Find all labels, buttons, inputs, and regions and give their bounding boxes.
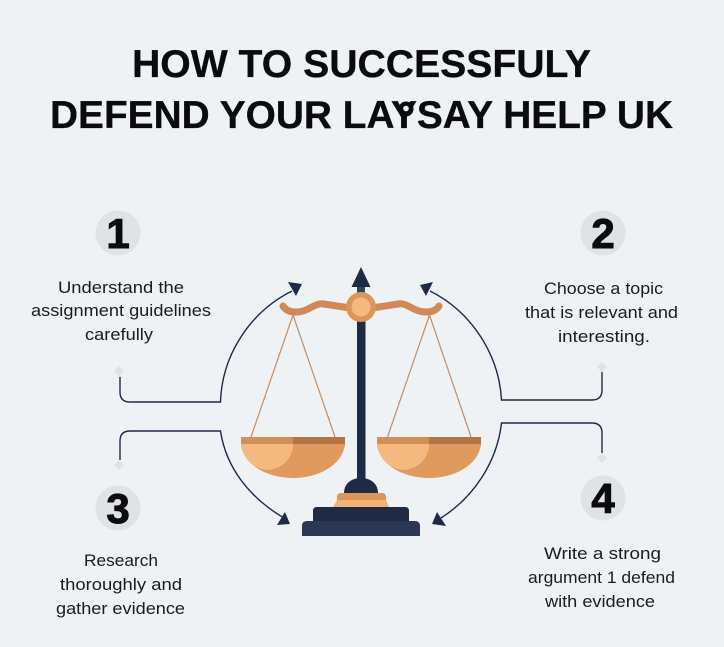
- right pan: [377, 437, 481, 478]
- step 3 text: [56, 552, 185, 618]
- step 4 text: with evidence: [544, 593, 655, 611]
- step 2 text: Choose a topic: [544, 280, 663, 298]
- step 3 text: thoroughly and: [60, 576, 182, 594]
- step 3 number badge: 3: [106, 485, 130, 532]
- pivot: [346, 292, 376, 322]
- step 4 text: Write a strong: [544, 545, 661, 563]
- icon: balance scale: [241, 267, 481, 536]
- step 1 text: carefully: [85, 326, 154, 344]
- step 2 number badge: 2: [591, 210, 615, 257]
- step 4 number badge: 4: [591, 475, 615, 522]
- title: DEFEND YOUR LAYSAY HELP UK: [50, 94, 673, 137]
- scale beam: [283, 304, 439, 312]
- step 1: [31, 210, 211, 344]
- scale base: [302, 478, 420, 536]
- step 1 text: [31, 279, 211, 344]
- title: HOW TO SUCCESSFULY: [132, 43, 591, 86]
- arrow: step 2 to scale: [420, 282, 607, 400]
- step 2 text: interesting.: [558, 328, 650, 346]
- step 3 text: Research: [84, 552, 158, 570]
- scale post: [357, 318, 366, 483]
- step 1 number badge: 1: [106, 210, 130, 257]
- right strings: [388, 315, 471, 437]
- arrow: step 1 to scale: [114, 282, 302, 402]
- left pan: [241, 437, 345, 478]
- arrow: step 4 to scale: [432, 423, 607, 526]
- step 1 number badge: [96, 210, 140, 257]
- step 4 text: argument 1 defend: [528, 569, 675, 587]
- step 2 number badge: [580, 210, 626, 257]
- arrow: step 3 to scale: [114, 431, 290, 525]
- step 2: [525, 210, 678, 346]
- title: [50, 43, 673, 137]
- left strings: [251, 315, 335, 437]
- step 3: [56, 485, 185, 618]
- step 4 text: [528, 545, 675, 611]
- step 2 text: [525, 280, 678, 346]
- step 2 text: that is relevant and: [525, 304, 678, 322]
- step 3 text: gather evidence: [56, 600, 185, 618]
- step 4: [528, 475, 675, 611]
- step 1 text: Understand the: [58, 279, 184, 297]
- step 4 number badge: [580, 475, 626, 522]
- scale top arrow: [352, 267, 370, 296]
- step 1 text: assignment guidelines: [31, 302, 211, 320]
